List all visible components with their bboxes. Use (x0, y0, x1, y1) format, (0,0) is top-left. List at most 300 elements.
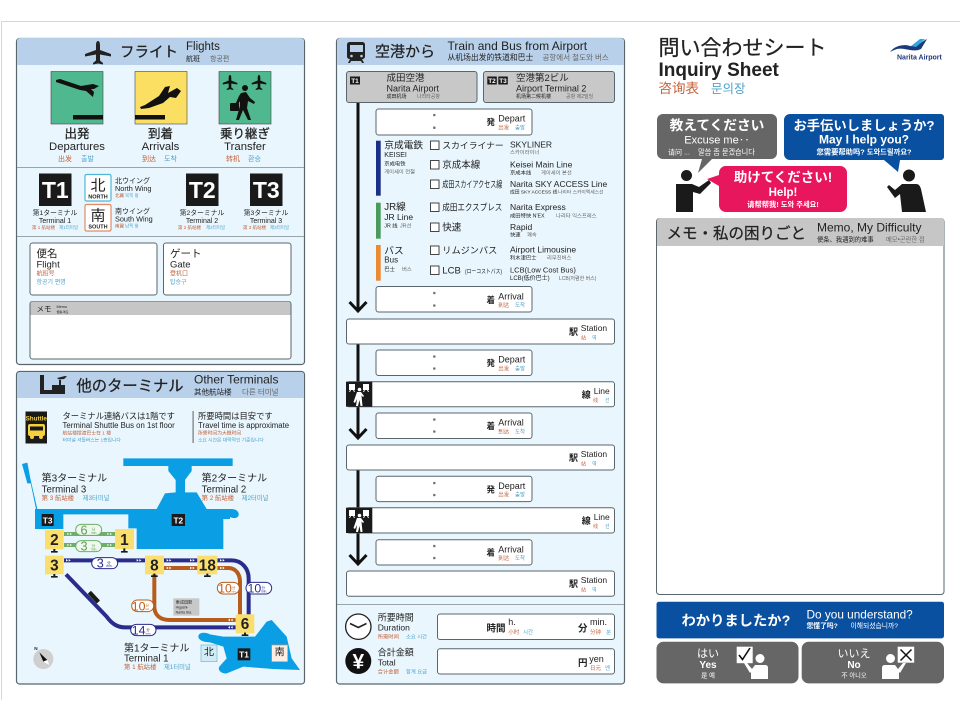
row: depart 2: Depart (498, 355, 526, 365)
button: yes: 是 예 (701, 670, 715, 680)
row: line 2 (346, 508, 614, 533)
option: Keisei Main Line (430, 159, 573, 176)
option: LCB: LCB(低价巴士) (510, 274, 550, 282)
north wing: 北 (90, 178, 106, 194)
panel: memo, my difficulty: 便条、我遇到的难事 (817, 235, 874, 244)
terminal 1 badge: T1 (42, 177, 69, 203)
row: line 2: 线 (593, 523, 598, 530)
row: line 1 (346, 382, 614, 407)
field: memo: メモ (36, 305, 52, 314)
icon: person left (676, 170, 711, 212)
field: duration (438, 614, 614, 640)
heading: other terminals: 他のターミナル (76, 378, 184, 395)
operator: Keisei (376, 138, 423, 196)
green shuttle lines (64, 523, 115, 554)
option: Narita Sky Access: 나리타 스카이엑세스선 (558, 189, 603, 196)
logo: Narita Airport (890, 39, 943, 62)
label: terminal 1: 제1터미널 (164, 662, 191, 671)
heading: train and bus: 从机场出发的铁道和巴士 (448, 52, 533, 62)
row: arrival 2: 도착 (515, 427, 525, 435)
origin: Narita Airport: 나리타공항 (417, 93, 440, 100)
operator: JR: JR 线 (384, 222, 398, 230)
row: arrival 2 (376, 413, 532, 438)
south wing: SOUTH (88, 224, 108, 230)
origin: Narita Airport: 成田机场 (386, 93, 407, 100)
heading: flights: フライト (120, 45, 178, 61)
icon: check board (737, 647, 768, 679)
speech bubble: help: 助けてください! (734, 169, 832, 185)
stop 1 (115, 529, 134, 553)
row: line 2: 선 (605, 523, 610, 530)
north wing: North Wing (115, 184, 152, 193)
banner: do you understand (656, 602, 944, 638)
icon: shuttle bus (26, 412, 47, 444)
row: depart 1: Depart (498, 114, 526, 124)
logo: Narita Airport: Narita Airport (897, 54, 943, 62)
terminal 3 badge: 第3ターミナル (244, 208, 288, 217)
operator: Bus: Bus (384, 255, 398, 264)
option: Skyliner (430, 140, 552, 156)
speech bubble: may I help you (784, 114, 944, 172)
stop 1: 1 (120, 532, 129, 549)
duration pills: 分 (262, 585, 266, 590)
green shuttle lines: 3 (80, 540, 88, 554)
field: flight number: 航班号 (36, 270, 55, 278)
label: terminal 2 (202, 472, 269, 502)
label: terminal 3: Terminal 3 (42, 484, 86, 495)
row: arrival 2: Arrival (498, 418, 524, 428)
origin: Narita Airport: Narita Airport (386, 83, 440, 93)
row: arrival 1: 到达 (498, 301, 510, 309)
terminal 2 and 3 building (22, 458, 239, 549)
heading: train and bus (347, 39, 609, 63)
option: Narita Express: 成田特快 N'EX (510, 212, 545, 220)
operator: JR: JR선 (400, 222, 411, 230)
label: duration: Duration (378, 623, 410, 633)
navy and orange shuttle lines (64, 560, 249, 627)
terminal 2 badge (178, 174, 225, 231)
operator: Bus: 버스 (402, 265, 412, 273)
field: gate: Gate (170, 260, 191, 270)
option: LCB: (ローコストバス) (465, 268, 502, 276)
label: terminal 1: 第1ターミナル (124, 642, 189, 655)
field: flight number: 항공기 편명 (36, 278, 66, 286)
label: terminal 1: 第 1 航站楼 (124, 662, 157, 671)
icon: yen (345, 648, 371, 674)
row: arrival 3 (376, 540, 532, 565)
field: gate (164, 243, 291, 295)
option: Limousine: Airport Limousine (510, 245, 576, 255)
terminal 2 badge: 第2ターミナル (180, 208, 224, 217)
stop 2: 2 (50, 532, 59, 549)
row: arrival 1: 도착 (515, 301, 525, 309)
row: depart 1: 出发 (498, 123, 510, 131)
stop 18: 18 (199, 557, 216, 574)
south wing: South Wing (115, 214, 153, 224)
heading: flights (85, 41, 229, 64)
duration pills (92, 557, 272, 638)
duration pills: 分 (107, 560, 111, 565)
button: no: 不 아니오 (841, 670, 867, 680)
field: gate: 登机口 (170, 270, 188, 278)
terminal 2 badge: 제2터미널 (206, 224, 225, 231)
row: depart 3 (376, 476, 532, 502)
north wing (85, 174, 152, 201)
option: Narita Express: 나리타 익스프레스 (556, 212, 597, 220)
note: travel time: Travel time is approximate (198, 421, 289, 430)
title: 문의장 (711, 82, 746, 96)
heading: train and bus: 空港から (375, 44, 435, 61)
row: depart 2: 出发 (498, 364, 510, 372)
row: station 1: Station (581, 323, 607, 333)
map: terminal connections (22, 458, 300, 673)
terminal 2 label (172, 514, 185, 526)
option: LCB (430, 266, 597, 282)
terminal 3 label (42, 514, 54, 526)
button: yes: Yes (699, 660, 717, 671)
row: arrival 3: 到达 (498, 554, 510, 562)
origin: Airport Terminal 2: 공항 제2빌딩 (566, 93, 593, 100)
green shuttle lines: 分 (92, 527, 96, 532)
heading: flights: Flights (186, 41, 220, 53)
label: Higashi-Narita: 東成田駅 (176, 599, 193, 605)
option: Skyliner: SKYLINER (510, 140, 552, 150)
option: Rapid: 快速 (510, 231, 521, 239)
speech bubble: may I help you: May I help you? (819, 132, 909, 146)
field: total: 円 (578, 658, 588, 669)
row: arrival 1: 着 (486, 295, 495, 305)
option: Rapid (430, 222, 537, 239)
origin: Airport Terminal 2: T2 (488, 78, 496, 85)
icon: compass: N (34, 646, 38, 651)
label: terminal 3: 第 3 航站楼 (42, 493, 75, 502)
stop 2 (45, 530, 64, 553)
option: Limousine: 리무진버스 (547, 253, 571, 261)
option: LCB: LCB(Low Cost Bus) (510, 266, 576, 275)
terminal 1 label: T1 (239, 649, 249, 659)
row: station 3: 站 (581, 586, 586, 593)
button: no (802, 642, 944, 683)
label: terminal 1 (124, 642, 191, 671)
option: Narita Express: 成田エクスプレス (442, 202, 502, 212)
option: Rapid: Rapid (510, 222, 532, 232)
heading: train and bus: 공항에서 철도와 버스 (542, 52, 609, 62)
field: duration: 시간 (523, 628, 533, 636)
row: station 3: 駅 (569, 579, 578, 589)
duration pills: 分 (146, 603, 150, 608)
operator: Bus: 巴士 (384, 265, 396, 273)
banner: do you understand: 이해되셨습니까? (850, 621, 898, 630)
operator: Keisei: 京成电铁 (384, 160, 406, 168)
terminal 1 badge (32, 174, 78, 231)
title: 問い合わせシート (658, 37, 826, 60)
origin: Narita Airport: 成田空港 (386, 72, 425, 84)
row: arrival 3: Arrival (498, 544, 524, 554)
speech bubble: excuse me: 말씀 좀 묻겠습니다 (698, 148, 755, 156)
operator: Bus: バス (384, 246, 404, 257)
field: duration: h. (508, 617, 516, 627)
label: total (378, 647, 427, 675)
field: memo (30, 302, 291, 359)
icon: shuttle bus: Shuttle (26, 416, 47, 422)
text: arrivals: Arrivals (142, 141, 180, 153)
route line 1 (350, 102, 366, 311)
terminal 1 badge: 第 1 航站楼 (32, 224, 56, 231)
terminal 2 badge: Terminal 2 (186, 218, 218, 225)
row: station 1: 站 (581, 334, 586, 341)
label: terminal 2: 제2터미널 (242, 493, 269, 502)
terminal 3 badge: 제3터미널 (270, 224, 289, 231)
title: 咨询表 (658, 81, 699, 96)
option: Narita Sky Access: 成田 SKY ACCESS 线 (510, 189, 558, 196)
option: Skyliner: スカイライナー (442, 140, 504, 150)
row: station 2 (346, 445, 614, 470)
row: station 1 (346, 319, 614, 344)
note: shuttle: Terminal Shuttle Bus on 1st floor (62, 421, 175, 430)
note: travel time (192, 411, 289, 444)
option: LCB: LCB(저렴한 버스) (559, 275, 597, 282)
text: transfer (220, 127, 270, 163)
terminal 1 badge: Terminal 1 (39, 218, 71, 225)
heading: other terminals: Other Terminals (194, 372, 278, 386)
panel: memo, my difficulty: 메모•곤란한 점 (886, 236, 925, 244)
field: duration: min. (590, 617, 607, 627)
button: no: No (847, 660, 861, 671)
duration pills: min. (146, 631, 151, 635)
operator: Keisei: 게이세이 전철 (384, 167, 415, 175)
option: LCB: LCB (442, 266, 461, 276)
option: Narita Express (430, 202, 597, 220)
label: terminal 2: 第2ターミナル (202, 472, 267, 485)
label: total: Total (378, 657, 396, 667)
option: Keisei Main Line: Keisei Main Line (510, 159, 573, 169)
heading: flights: 航班 (186, 54, 200, 63)
stop 6: 6 (241, 616, 249, 633)
stop 8: 8 (150, 557, 159, 574)
label: terminal 1: Terminal 1 (124, 654, 169, 665)
row: station 1: 역 (592, 334, 597, 341)
terminal 1 badge: 제1터미널 (59, 224, 78, 231)
heading: other terminals: 其他航站楼 (194, 386, 232, 396)
terminal 3 badge: Terminal 3 (250, 218, 282, 225)
option: Rapid: 쾌속 (527, 231, 537, 239)
heading: other terminals (40, 372, 279, 396)
text: arrivals: 到达 (142, 154, 156, 163)
note: shuttle (62, 411, 175, 444)
note: travel time: 所需时间为大概时间 (198, 430, 241, 436)
icon: cross board (882, 647, 914, 679)
speech bubble: help (707, 166, 847, 212)
option: Keisei Main Line: 京成本線 (442, 159, 481, 171)
south wing: 南ウイング (115, 206, 150, 216)
label: total: 合計金額 (378, 647, 414, 658)
note: shuttle: 航站楼摆渡巴士在 1 楼 (62, 430, 111, 436)
row: line 1: 선 (605, 397, 610, 404)
text: departures: 出发 (58, 154, 72, 163)
stop 6 (236, 614, 254, 636)
row: depart 1: 発 (486, 117, 496, 127)
title: Inquiry Sheet (658, 60, 780, 81)
option: Narita Sky Access: 成田スカイアクセス線 (442, 178, 502, 190)
north wing: 北翼 (115, 192, 124, 199)
icon: person right (887, 170, 926, 212)
row: arrival 2: 到达 (498, 427, 510, 435)
origin: Airport Terminal 2: Airport Terminal 2 (516, 83, 586, 93)
panel: flights (16, 38, 304, 364)
field: duration: 분 (606, 629, 611, 636)
label: Higashi-Narita: Higashi- (176, 606, 188, 610)
text: arrivals (142, 126, 180, 163)
origin: Airport Terminal 2: 机场第二候机楼 (516, 93, 551, 100)
operator: Keisei: 京成電鉄 (384, 138, 423, 151)
north wing: NORTH (88, 194, 108, 200)
green shuttle lines: min. (91, 547, 97, 551)
icon: transfer (219, 72, 271, 124)
icon: arrivals (135, 72, 187, 124)
row: station 2: 역 (592, 460, 597, 467)
south wing: 南 (90, 208, 106, 224)
duration pills: 14 (132, 624, 146, 638)
terminal 3 label: T3 (43, 515, 53, 525)
note: shuttle: ターミナル連絡バスは1階です (62, 411, 175, 421)
stop 3 (45, 556, 64, 578)
row: station 3: 역 (592, 586, 597, 593)
heading: train and bus: Train and Bus from Airport (448, 39, 588, 53)
row: depart 2: 発 (486, 358, 496, 368)
option: Limousine (430, 245, 576, 261)
banner: do you understand: Do you understand? (806, 607, 913, 621)
label: terminal 3: 제3터미널 (83, 493, 110, 502)
route line 4 (356, 470, 360, 508)
row: station 2: 站 (581, 460, 586, 467)
speech bubble: help: 请帮帮我! 도와 주세요! (747, 200, 819, 209)
field: total: yen (589, 654, 604, 664)
duration pills: 10 (218, 582, 232, 596)
north marker (201, 645, 217, 662)
panel: other terminals (16, 372, 304, 684)
option: Keisei Main Line: 京成本线 (510, 168, 532, 176)
north marker: 北 (204, 647, 214, 659)
field: flight number (30, 243, 157, 295)
row: line 1: 线 (593, 397, 598, 404)
row: station 2: 駅 (569, 453, 578, 463)
text: transfer: 转机 (226, 154, 240, 163)
label: terminal 3 (42, 472, 110, 502)
text: departures: 출발 (81, 154, 94, 163)
green shuttle lines: 分 (92, 543, 96, 548)
option: Skyliner: 스카이라이너 (510, 148, 539, 156)
icon: departures (51, 72, 103, 124)
option: Limousine: 利木津巴士 (510, 253, 537, 261)
note: shuttle: 터미널 셔틀버스는 1층입니다 (62, 436, 121, 444)
field: duration: 時間 (486, 623, 506, 635)
speech bubble: excuse me: 请问 ... (668, 148, 690, 156)
field: duration: 分钟 (590, 628, 602, 636)
row: line 2: Line (594, 512, 610, 522)
stop 8 (145, 556, 164, 577)
row: line 1: Line (594, 386, 610, 396)
row: line 2: 線 (582, 515, 591, 526)
text: arrivals: 到着 (148, 126, 173, 141)
operator: JR: JR Line (384, 212, 413, 222)
operator: Keisei: KEISEI (384, 152, 407, 159)
row: arrival 1 (376, 286, 532, 312)
heading: flights: 항공편 (210, 54, 229, 63)
speech bubble: help: Help! (769, 187, 797, 199)
text: departures: 出発 (64, 127, 90, 141)
text: transfer: Transfer (224, 141, 266, 153)
row: arrival 3: 도착 (515, 554, 525, 562)
stop 3: 3 (50, 557, 59, 574)
label: terminal 2: 第 2 航站楼 (202, 493, 235, 502)
text: arrivals: 도착 (164, 155, 177, 163)
origin: Narita Airport (346, 72, 477, 102)
row: depart 3: 出发 (498, 491, 510, 499)
south marker (272, 645, 288, 662)
stop 18 (197, 556, 217, 577)
label: duration: 所要時間 (378, 612, 414, 623)
field: total (438, 649, 614, 674)
field: total: 日元 (590, 665, 602, 672)
field: memo: 메모 (63, 309, 69, 314)
icon: yen: ¥ (352, 650, 364, 674)
bus on line (88, 591, 100, 603)
label: duration: 所需时间 (378, 632, 399, 640)
field: memo: Memo (56, 305, 67, 309)
duration pills: min. (231, 589, 237, 593)
option: Limousine: リムジンバス (442, 246, 497, 256)
label: total: 合计金额 (378, 667, 400, 675)
duration pills: 分 (146, 627, 150, 632)
speech bubble: may I help you: 您需要帮助吗? 도와드릴까요? (816, 148, 912, 156)
row: arrival 2: 着 (486, 421, 495, 431)
label: Higashi-Narita (173, 598, 199, 616)
duration pills: min. (145, 607, 150, 611)
duration pills: 3 (97, 557, 104, 571)
row: depart 2: 출발 (515, 364, 525, 372)
button: yes (656, 642, 798, 683)
panel: memo, my difficulty (656, 218, 944, 594)
south wing: 남쪽 윙 (125, 222, 139, 230)
field: duration: 分 (578, 623, 588, 635)
label: duration: 소요 시간 (406, 633, 427, 640)
option: Narita Sky Access: Narita SKY ACCESS Line (510, 179, 607, 189)
duration pills: min. (261, 589, 267, 593)
terminal 1 badge: 第1ターミナル (33, 208, 77, 217)
terminal 2 label: T2 (173, 515, 184, 525)
label: Higashi-Narita: Narita Sta. (176, 610, 192, 614)
field: duration: 小时 (508, 628, 520, 636)
banner: do you understand: わかりましたか? (682, 613, 790, 630)
panel: train and bus from airport (336, 38, 624, 684)
duration pills: 10 (132, 599, 146, 613)
row: station 2: Station (581, 449, 607, 459)
green shuttle lines: 6 (80, 523, 88, 537)
route line 5 (350, 533, 366, 564)
terminal 1 building (198, 620, 300, 673)
field: memo: 便条 (56, 309, 63, 314)
terminal 3 badge: T3 (253, 177, 280, 203)
field: gate: ゲート (170, 248, 202, 260)
field: flight number: Flight (36, 260, 60, 270)
label: total: 합계 요금 (406, 667, 427, 675)
row: station 1: 駅 (569, 327, 578, 337)
origin: Narita Airport: T1 (351, 78, 359, 85)
origin: Airport Terminal 2: T3 (499, 78, 507, 85)
terminal 3 badge (243, 174, 289, 231)
note: travel time: 소요 시간은 대략적인 기준입니다 (198, 436, 264, 444)
operator: JR (376, 200, 413, 239)
